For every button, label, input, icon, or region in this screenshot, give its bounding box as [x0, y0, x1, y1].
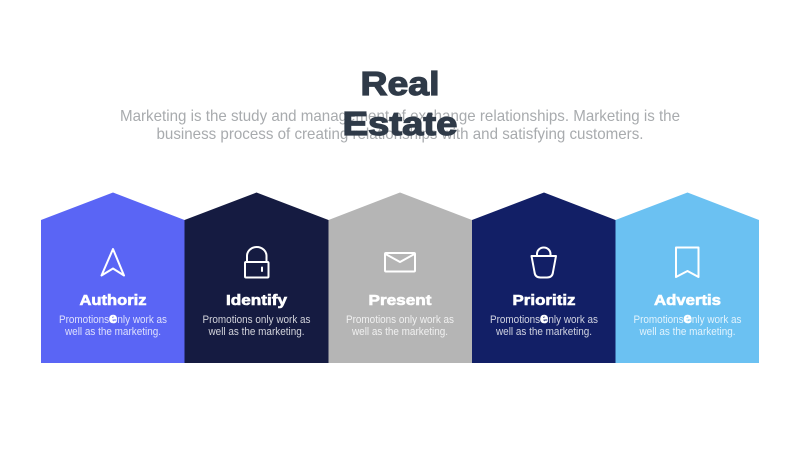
panel: Advertise	[616, 192, 759, 363]
subtitle text: Marketing is the study and management of exchange relationships. Marketing is the	[120, 108, 680, 125]
body text: Identify: well as the marketing.	[208, 326, 304, 338]
body text: Prioritize: well as the marketing.	[495, 326, 592, 338]
subtitle text: business process of creating relationships with and satisfying customers.	[156, 126, 644, 143]
body text: Present	[346, 314, 454, 338]
subtitle text	[120, 108, 680, 143]
body text: Authorize: Promotions only work as	[59, 314, 167, 326]
heading: Prioritize: e	[540, 310, 548, 327]
heading: Advertise	[654, 292, 721, 327]
panel: Prioritize	[472, 192, 616, 363]
icon: envelope	[385, 253, 415, 272]
icon: padlock	[245, 247, 268, 278]
heading: Advertise: e	[683, 310, 692, 327]
heading: Identify: Identify	[226, 292, 288, 309]
icon: bookmark	[676, 248, 698, 277]
heading: Present: Present	[368, 292, 432, 309]
heading: Prioritize	[512, 292, 576, 327]
panel: Authorize	[41, 192, 184, 363]
title: Estate	[342, 105, 458, 142]
body text: Present: well as the marketing.	[351, 326, 448, 338]
heading: Authorize	[80, 292, 146, 327]
body text: Advertise: well as the marketing.	[639, 326, 736, 338]
panel shape: Prioritize	[472, 192, 616, 363]
body text: Advertise: Promotions only work as	[634, 314, 742, 326]
body text: Identify	[202, 314, 311, 338]
body text: Advertise	[634, 314, 742, 338]
panel shape: Authorize	[41, 192, 184, 363]
title	[342, 65, 458, 142]
body text: Authorize: well as the marketing.	[64, 326, 161, 338]
body text: Identify: Promotions only work as	[202, 314, 311, 326]
body text: Authorize	[59, 314, 167, 338]
heading: Authorize: Authoriz	[80, 292, 146, 309]
heading: Advertise: Advertis	[654, 292, 721, 309]
body text: Prioritize	[490, 314, 598, 338]
panel shape: Identify	[184, 192, 328, 363]
body text: Present: Promotions only work as	[346, 314, 454, 326]
panel: Identify	[184, 192, 328, 363]
heading: Authorize: e	[109, 310, 117, 327]
body text: Prioritize: Promotions only work as	[490, 314, 598, 326]
icon: navigation arrow	[102, 249, 124, 276]
heading: Prioritize: Prioritiz	[512, 292, 576, 309]
panel shape: Present	[328, 192, 472, 363]
panel shape: Advertise	[616, 192, 759, 363]
panel: Present	[328, 192, 472, 363]
icon: shopping bag	[532, 248, 556, 278]
title: Real	[360, 65, 440, 102]
